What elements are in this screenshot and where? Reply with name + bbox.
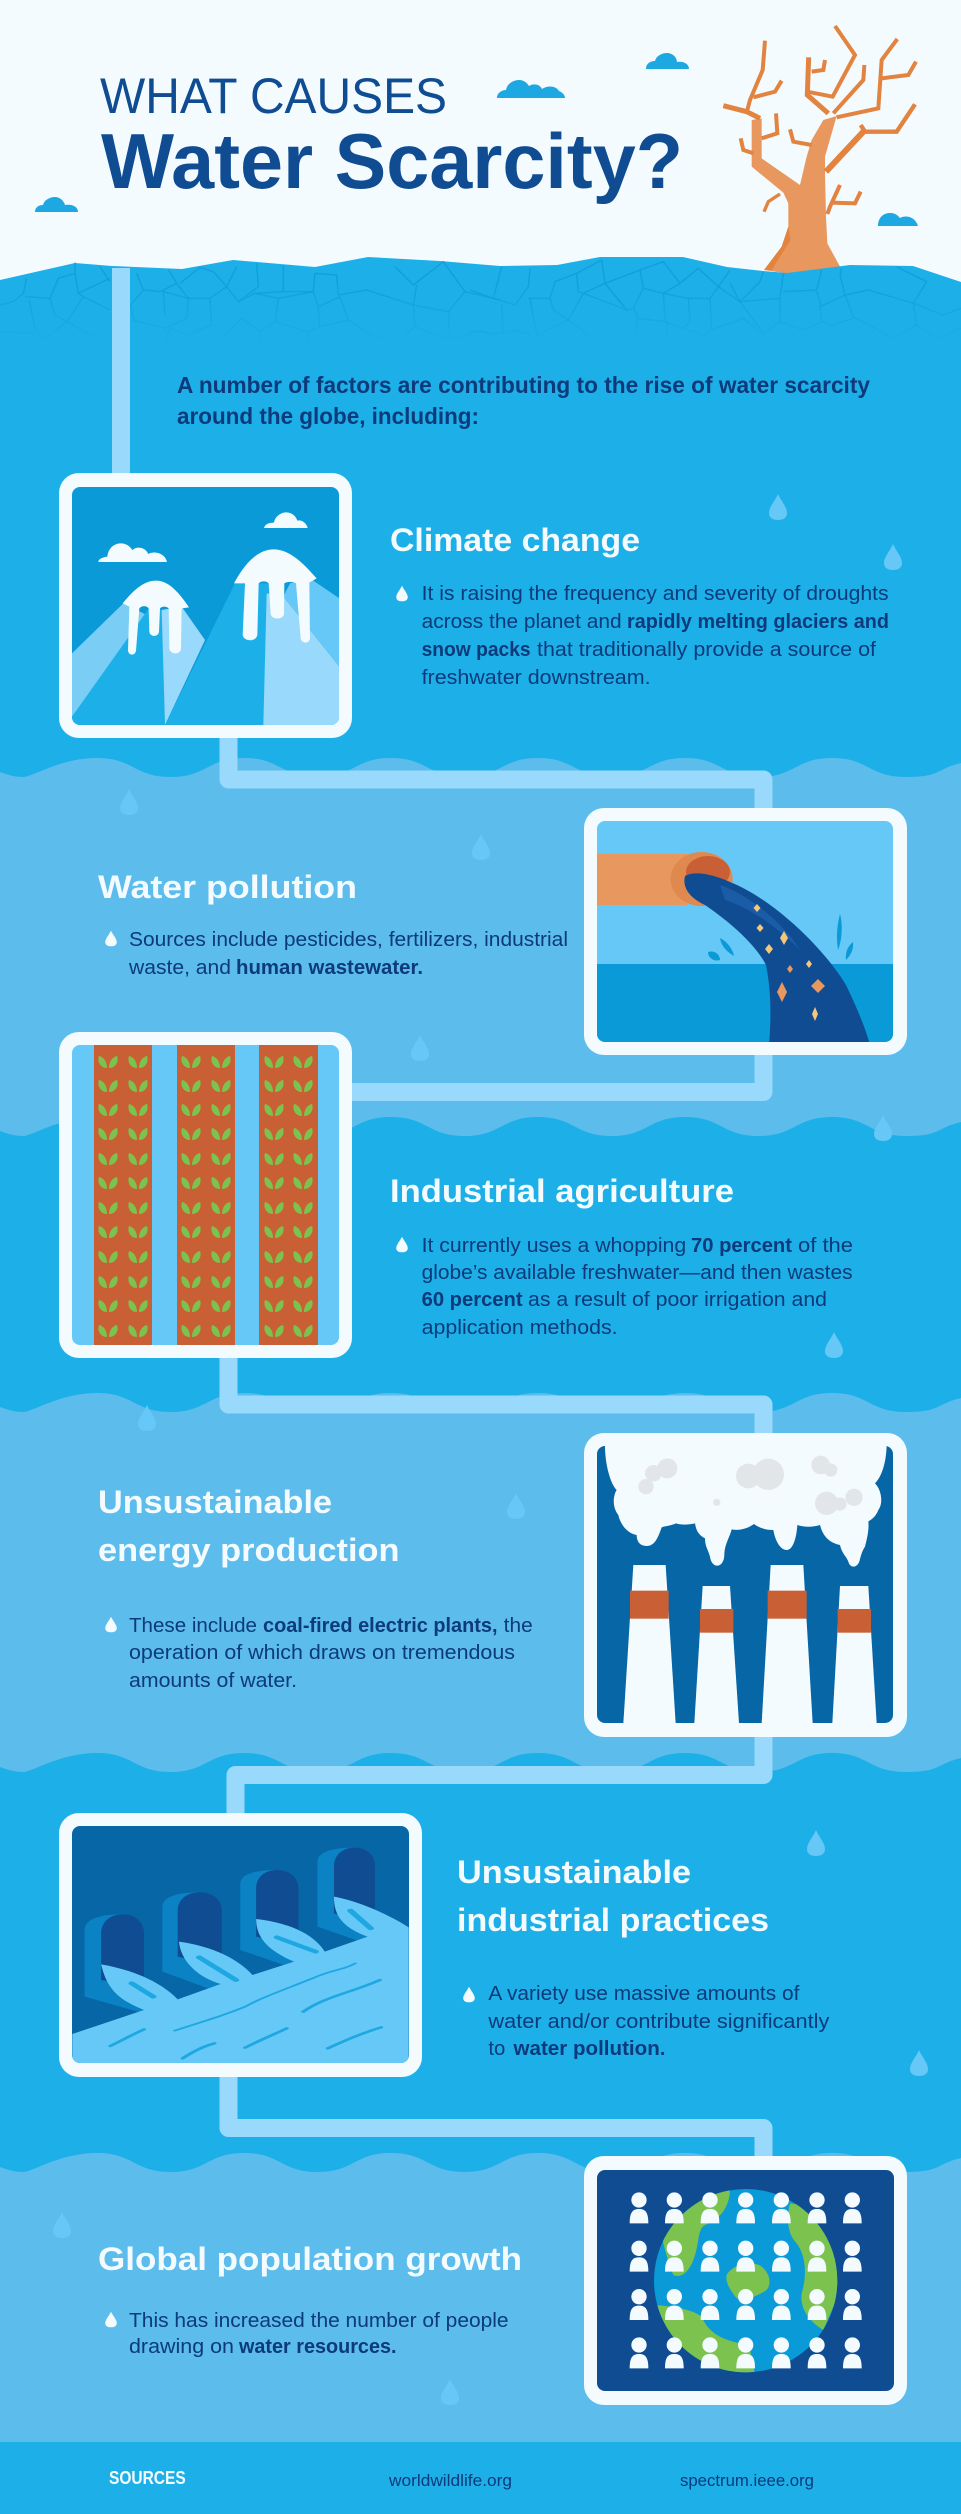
- section: industrial agriculture: of the: [798, 1234, 853, 1257]
- section: industrial practices: A variety use massive amounts of: [488, 1982, 800, 2005]
- section: population growth: water resources.: [238, 2335, 396, 2358]
- cracks: left: [0, 262, 500, 350]
- bullet drop: [105, 1617, 117, 1632]
- section: energy production: amounts of water.: [129, 1669, 297, 1692]
- section: climate change: It is raising the frequency and severity of droughts: [422, 582, 889, 605]
- section: climate change: [390, 522, 889, 689]
- title: WHAT CAUSES: [100, 68, 447, 124]
- section: industrial agriculture: It currently uses a whopping: [422, 1234, 686, 1257]
- section: industrial practices: water and/or contribute significantly: [487, 2010, 830, 2033]
- section: energy production: energy production: [98, 1532, 400, 1568]
- panel: industrial practices illustration: [59, 1813, 422, 2077]
- rain drops: [53, 494, 928, 2405]
- intro text: [177, 372, 870, 429]
- section: energy production: Unsustainable: [98, 1484, 332, 1520]
- section: climate change: across the planet and: [422, 610, 622, 633]
- section: population growth: [98, 2241, 522, 2358]
- sky background: [0, 0, 961, 300]
- section: energy production: the: [504, 1614, 533, 1637]
- sources: worldwildlife.org: [388, 2471, 512, 2490]
- bullet drop: [396, 586, 408, 601]
- cracks: right: [470, 260, 961, 350]
- section: population growth: Global population growth: [98, 2241, 522, 2277]
- bullet drop: [105, 931, 117, 946]
- section: industrial practices: [457, 1854, 830, 2060]
- section: energy production: These include: [129, 1614, 257, 1637]
- section: water pollution: Sources include pesticides, fertilizers, industrial: [129, 928, 568, 951]
- globe: [654, 2188, 843, 2375]
- clouds: [35, 53, 918, 226]
- sources: SOURCES: [109, 2468, 186, 2488]
- section: water pollution: human wastewater.: [236, 956, 423, 979]
- panel: population growth illustration: [584, 2156, 907, 2405]
- section: industrial practices: Unsustainable: [457, 1854, 691, 1890]
- section: climate change: freshwater downstream.: [422, 666, 651, 689]
- section: energy production: operation of which draws on tremendous: [129, 1641, 515, 1664]
- title: [100, 68, 683, 205]
- intro text: around the globe, including:: [177, 403, 479, 429]
- section: industrial agriculture: 60 percent: [422, 1288, 523, 1311]
- section: water pollution: Water pollution: [98, 869, 357, 905]
- section: industrial agriculture: 70 percent: [691, 1234, 792, 1257]
- section: energy production: [98, 1484, 533, 1692]
- section: population growth: drawing on: [129, 2335, 234, 2358]
- panel: industrial agriculture illustration: [59, 1032, 352, 1358]
- section: industrial agriculture: as a result of poor irrigation and: [528, 1288, 827, 1311]
- bullet drop: [105, 2312, 117, 2327]
- section: industrial agriculture: globe’s available freshwater—and then wastes: [422, 1261, 853, 1284]
- section: industrial practices: water pollution.: [512, 2037, 666, 2060]
- section: industrial agriculture: [390, 1173, 853, 1339]
- wave bands: [0, 758, 961, 2473]
- section: water pollution: [98, 869, 568, 979]
- connecting pipe: [121, 268, 764, 2162]
- section: energy production: coal-fired electric plants,: [263, 1614, 498, 1637]
- panel: energy production illustration: [584, 1433, 907, 1737]
- panel: climate change illustration: [59, 473, 352, 738]
- section: industrial practices: industrial practices: [457, 1902, 769, 1938]
- section: industrial agriculture: application methods.: [422, 1316, 618, 1339]
- tree: [723, 26, 916, 273]
- section: water pollution: waste, and: [128, 956, 231, 979]
- people grid: [630, 2192, 862, 2368]
- bullet drop: [463, 1987, 475, 2002]
- footer band: [0, 2442, 961, 2514]
- sources: spectrum.ieee.org: [680, 2471, 814, 2490]
- section: climate change: Climate change: [390, 522, 640, 558]
- section: industrial agriculture: Industrial agriculture: [390, 1173, 734, 1209]
- sources: [109, 2468, 814, 2490]
- intro text: A number of factors are contributing to the rise of water scarcity: [177, 372, 870, 398]
- section: industrial practices: to: [488, 2037, 505, 2060]
- section: population growth: This has increased the number of people: [129, 2309, 509, 2332]
- bullet drop: [396, 1237, 408, 1252]
- title: Water Scarcity?: [101, 117, 683, 205]
- panel: water pollution illustration: [584, 808, 907, 1055]
- section: climate change: snow packs: [422, 638, 531, 661]
- section: climate change: rapidly melting glaciers and: [627, 610, 889, 633]
- section: climate change: that traditionally provide a source of: [537, 638, 876, 661]
